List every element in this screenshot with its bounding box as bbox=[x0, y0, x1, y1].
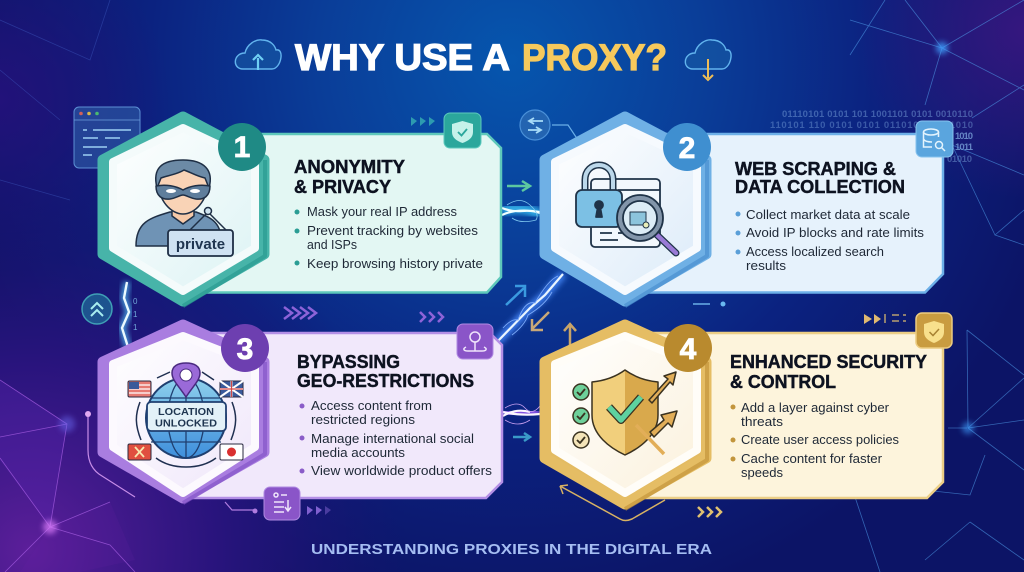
decorative browser window bbox=[74, 107, 140, 168]
icon: masked person bbox=[136, 160, 233, 256]
panel 2: web scraping and data collection bbox=[545, 117, 953, 306]
heading 4: & CONTROL bbox=[730, 372, 836, 392]
lightning: connector left vertical: 1 bbox=[133, 323, 138, 332]
binary text decoration: 01110101 0101 101 1001101 0101 0010110 bbox=[782, 109, 973, 120]
badge 2: 2 bbox=[679, 132, 695, 165]
bullets 1: Keep browsing history private bbox=[307, 257, 483, 271]
icon: database tile bbox=[916, 121, 953, 157]
binary text decoration bbox=[770, 109, 974, 165]
icon: map pin tile bbox=[457, 324, 493, 359]
bullets 4: threats bbox=[741, 415, 783, 429]
bullets 1 bbox=[294, 205, 483, 271]
bullets 4: Cache content for faster bbox=[741, 452, 882, 466]
arrows between cards bbox=[506, 181, 576, 441]
triangle markers bbox=[307, 117, 906, 515]
icon: globe location unlocked: LOCATION bbox=[158, 407, 214, 418]
lightning: diagonal bbox=[497, 274, 563, 342]
binary text decoration: 1011 bbox=[955, 142, 974, 153]
badge 4: 4 bbox=[680, 333, 697, 366]
chevrons decorations bbox=[284, 307, 721, 517]
panel 1: anonymity and privacy bbox=[103, 113, 501, 306]
flag: Japan bbox=[220, 444, 243, 460]
lightning: card 1 to card 2 bbox=[502, 200, 540, 222]
flag: red bbox=[128, 444, 151, 460]
lightning: connector left vertical bbox=[122, 282, 138, 347]
bullets 3: Manage international social bbox=[311, 432, 474, 446]
hexagon 1 bbox=[103, 117, 265, 306]
card 1 body bbox=[190, 134, 501, 292]
heading 4 bbox=[730, 352, 927, 392]
bullets 4: speeds bbox=[741, 466, 783, 480]
title bbox=[295, 37, 667, 78]
icon: cloud upload bbox=[235, 40, 281, 70]
icon: lock and magnifier bbox=[576, 165, 676, 253]
bullets 2: Avoid IP blocks and rate limits bbox=[746, 226, 924, 240]
heading 1: & PRIVACY bbox=[294, 177, 391, 197]
flag: USA bbox=[128, 381, 151, 397]
icon: shield tile bbox=[444, 113, 481, 148]
title: PROXY? bbox=[522, 37, 667, 78]
lightning: connector left vertical: 0 bbox=[133, 297, 138, 306]
binary text decoration: 1010 bbox=[955, 131, 973, 142]
circuit lines bbox=[85, 125, 665, 520]
badge 3 bbox=[221, 324, 269, 372]
bullets 1: Prevent tracking by websites bbox=[307, 224, 478, 238]
icon: globe location unlocked: UNLOCKED bbox=[155, 418, 217, 430]
heading 4: ENHANCED SECURITY bbox=[730, 352, 927, 372]
heading 2 bbox=[735, 159, 905, 197]
binary text decoration: 01010 bbox=[947, 154, 972, 165]
card 4 body bbox=[640, 333, 943, 498]
icon: cloud download bbox=[685, 40, 731, 80]
bullets 2: Access localized search bbox=[746, 245, 884, 259]
bullets 2: Collect market data at scale bbox=[746, 208, 910, 222]
icon: chevrons up circle bbox=[82, 294, 112, 324]
heading 3: GEO-RESTRICTIONS bbox=[297, 371, 474, 391]
icon: globe location unlocked bbox=[128, 363, 243, 467]
title: WHY USE A bbox=[295, 37, 510, 78]
badge 2 bbox=[663, 123, 711, 171]
icon: shield with checks and arrows bbox=[573, 370, 677, 455]
hexagon 3 bbox=[103, 325, 265, 503]
badge 1: 1 bbox=[234, 131, 250, 164]
badge 4 bbox=[664, 324, 712, 372]
bullets 2 bbox=[736, 208, 924, 273]
badge 1 bbox=[218, 123, 266, 171]
bullets 3 bbox=[300, 399, 492, 478]
hexagon 4 bbox=[545, 325, 707, 509]
lightning: card 3 to card 4 bbox=[503, 404, 540, 424]
bullets 3: View worldwide product offers bbox=[311, 464, 492, 478]
bullets 4: Create user access policies bbox=[741, 433, 899, 447]
heading 2: DATA COLLECTION bbox=[735, 177, 905, 197]
lightning: connector left vertical: 1 bbox=[133, 310, 138, 319]
bullets 1: and ISPs bbox=[307, 238, 357, 252]
bullets 3: Access content from bbox=[311, 399, 432, 413]
badge 3: 3 bbox=[237, 333, 253, 366]
bullets 3: media accounts bbox=[311, 446, 405, 460]
icon: route list tile bbox=[264, 487, 300, 520]
hexagon 2 bbox=[545, 117, 707, 306]
heading 1 bbox=[294, 157, 405, 197]
panel 4: enhanced security and control bbox=[545, 313, 952, 509]
heading 2: WEB SCRAPING & bbox=[735, 159, 896, 179]
heading 3: BYPASSING bbox=[297, 352, 400, 372]
bullets 2: results bbox=[746, 259, 786, 273]
icon: gold shield tile bbox=[916, 313, 952, 348]
footer tagline: UNDERSTANDING PROXIES IN THE DIGITAL ERA bbox=[311, 541, 712, 558]
card 2 body bbox=[640, 134, 943, 292]
card 3 body bbox=[190, 333, 502, 498]
panel 3: bypassing geo-restrictions bbox=[103, 324, 502, 520]
icon: swap arrows circle bbox=[520, 110, 550, 140]
bullets 4: Add a layer against cyber bbox=[741, 401, 889, 415]
heading 3 bbox=[297, 352, 474, 391]
bullets 3: restricted regions bbox=[311, 413, 415, 427]
heading 1: ANONYMITY bbox=[294, 157, 405, 177]
flag: UK bbox=[220, 381, 243, 397]
binary text decoration: 110101 110 0101 0101 011010 0101 1010 bbox=[770, 120, 973, 131]
icon: masked person: private bbox=[176, 236, 225, 253]
bullets 4 bbox=[730, 401, 899, 480]
bullets 1: Mask your real IP address bbox=[307, 205, 457, 219]
